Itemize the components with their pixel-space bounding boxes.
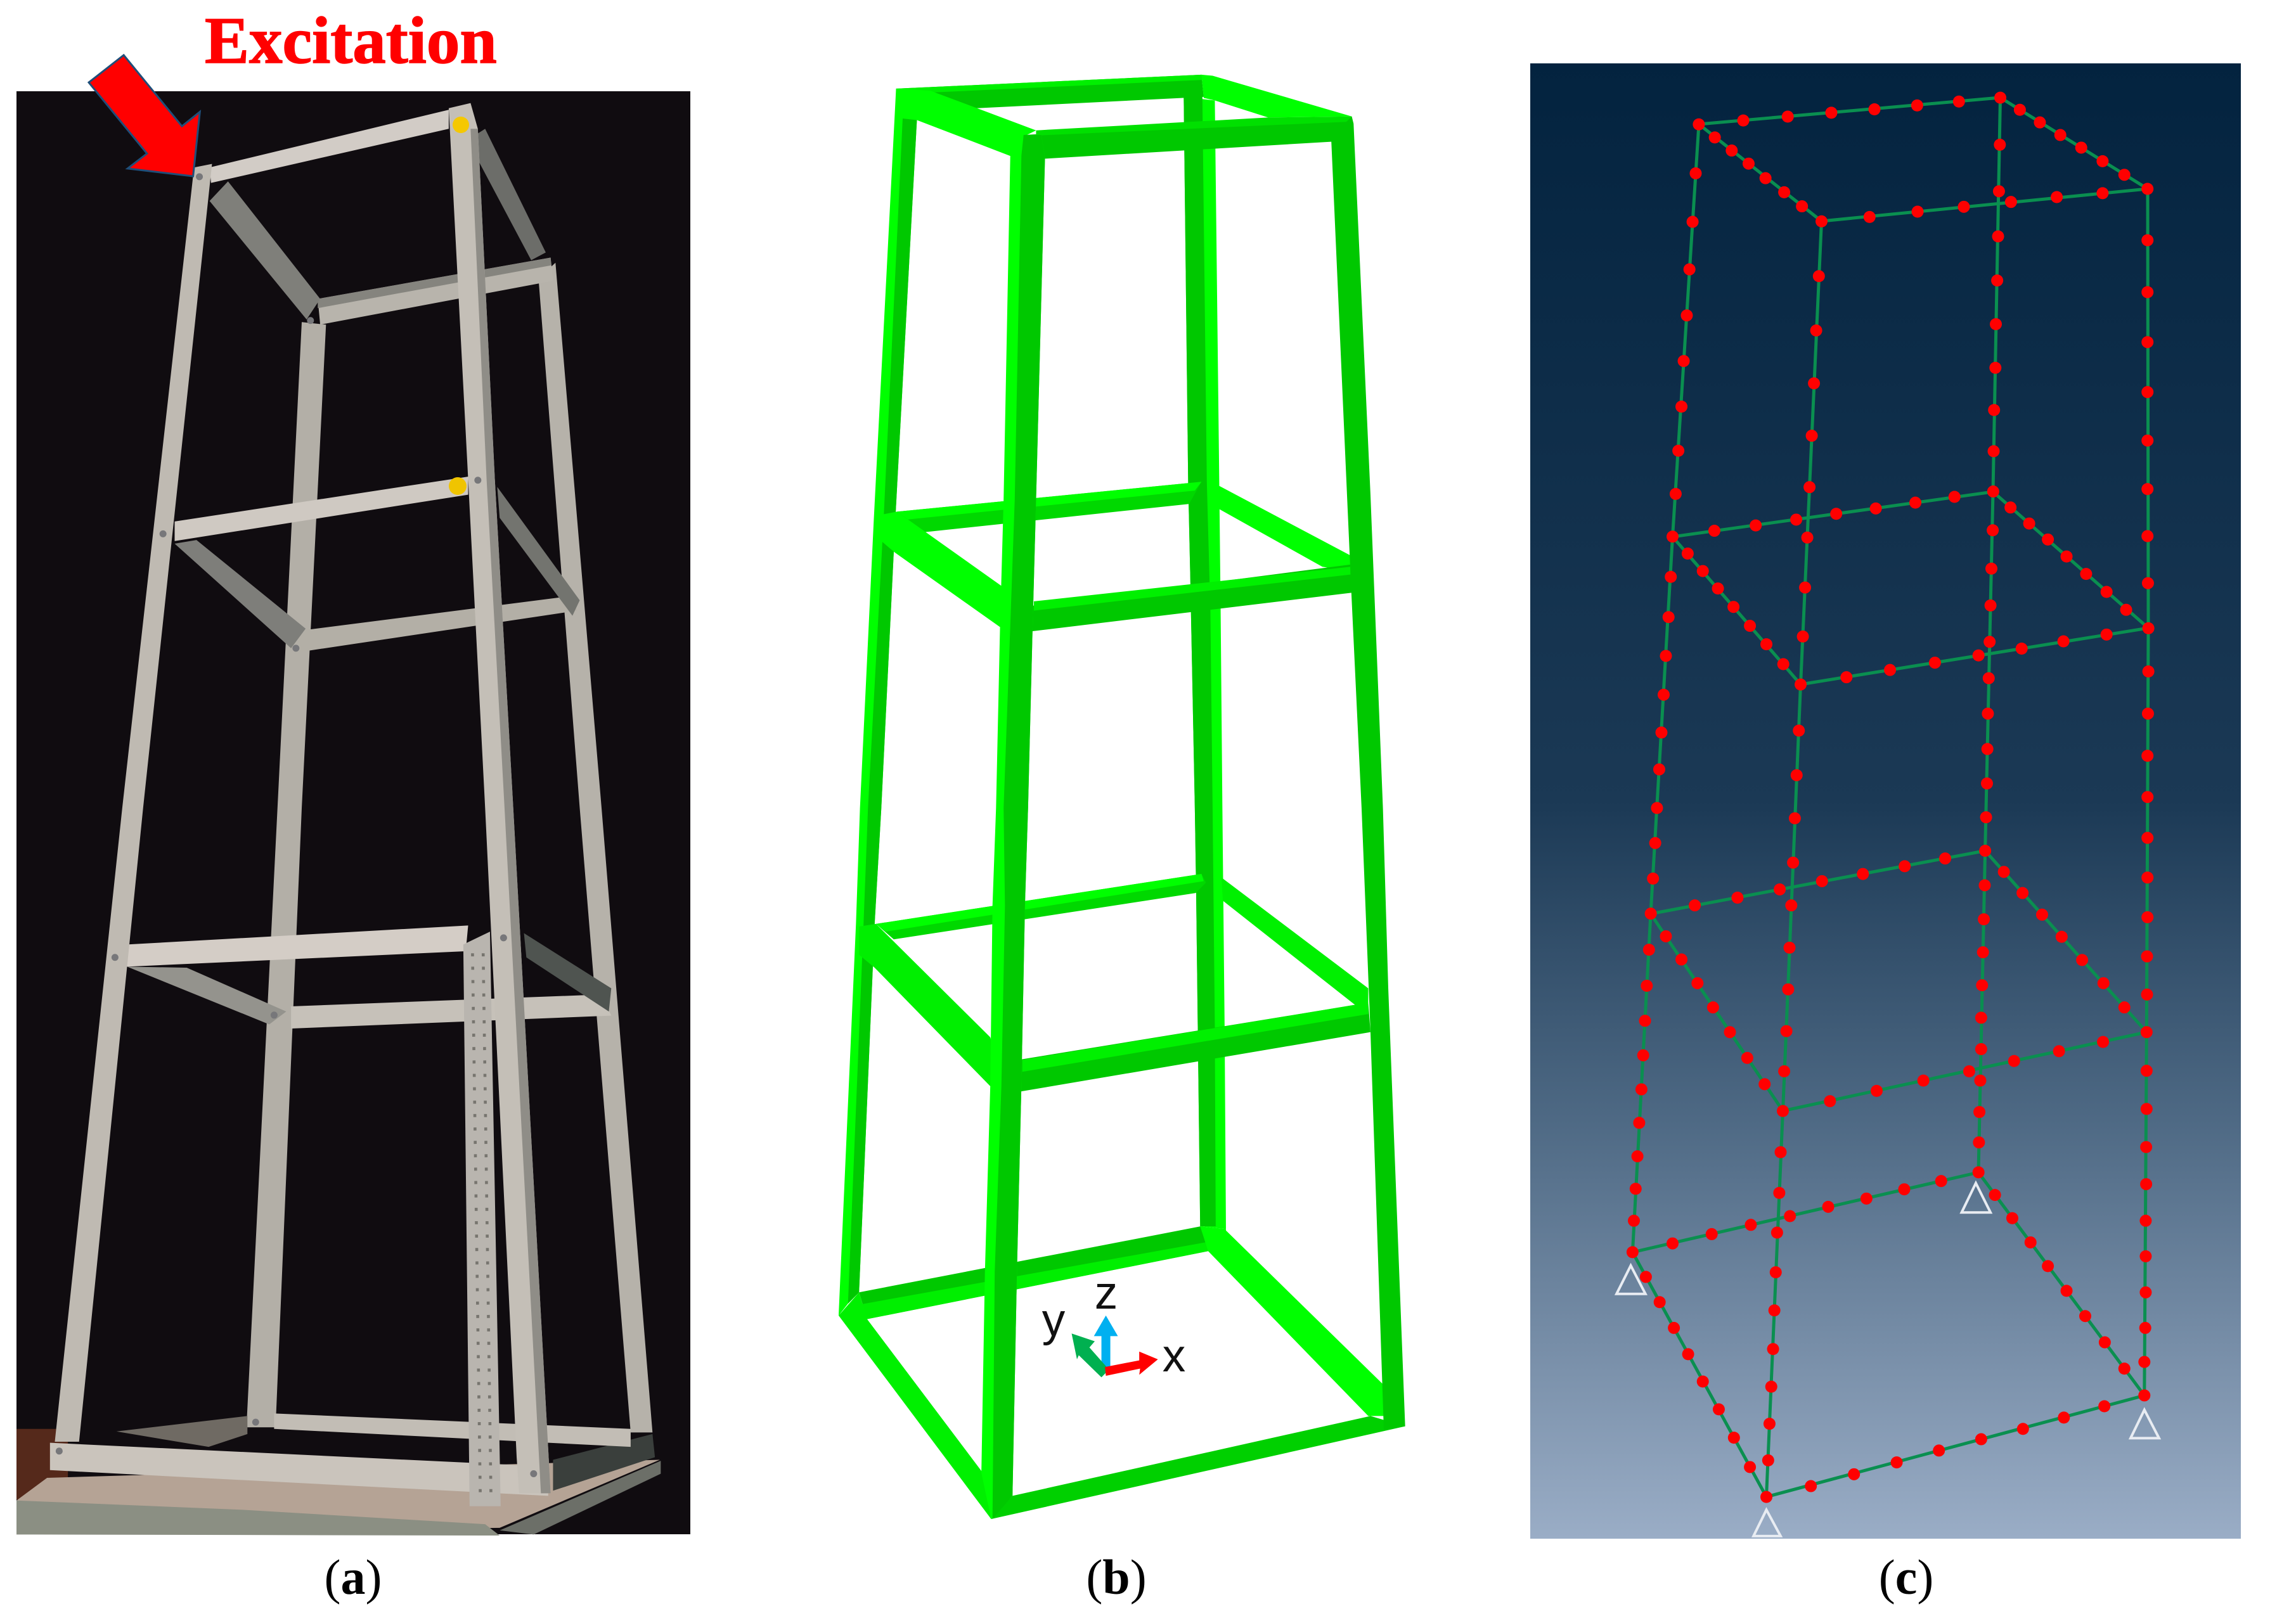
front right column <box>1331 117 1405 1430</box>
axis arrow: y <box>1072 1333 1109 1377</box>
axis arrow: x <box>1105 1352 1158 1376</box>
back beams <box>850 75 1208 1319</box>
axis label z: z <box>1095 1267 1118 1319</box>
yellow marker top <box>453 117 469 133</box>
back right column <box>1183 97 1226 1229</box>
table and floor of the photograph <box>16 1429 661 1536</box>
axis label y: y <box>1042 1295 1066 1346</box>
caption: a: (a) <box>325 1549 382 1605</box>
arrow: excitation direction <box>89 55 200 176</box>
caption: b: (b) <box>1086 1549 1147 1605</box>
boundary condition triangles <box>1616 1183 2159 1536</box>
heading: Excitation: Excitation <box>205 3 497 77</box>
bolts <box>59 177 534 1473</box>
front left column <box>981 135 1045 1519</box>
panel b: green 3D beam model <box>839 75 1405 1519</box>
front of frame: columns and beams <box>50 103 551 1496</box>
panel a: photograph of aluminium frame <box>16 91 690 1536</box>
yellow marker middle <box>449 477 467 495</box>
measuring ruler <box>463 932 501 1506</box>
mesh nodes: upper tower <box>1659 98 2148 797</box>
back left column <box>839 90 917 1316</box>
panel c: finite element mesh <box>1530 63 2241 1539</box>
axis label x: x <box>1163 1330 1185 1382</box>
mesh element lines <box>1632 98 2148 1497</box>
side beams <box>839 75 1393 1519</box>
axis arrow: z <box>1094 1316 1118 1369</box>
back of frame: columns and beams <box>117 129 652 1447</box>
mesh nodes: lower tower <box>1632 808 2148 1497</box>
front beams <box>991 117 1405 1519</box>
caption: c: (c) <box>1879 1549 1933 1605</box>
